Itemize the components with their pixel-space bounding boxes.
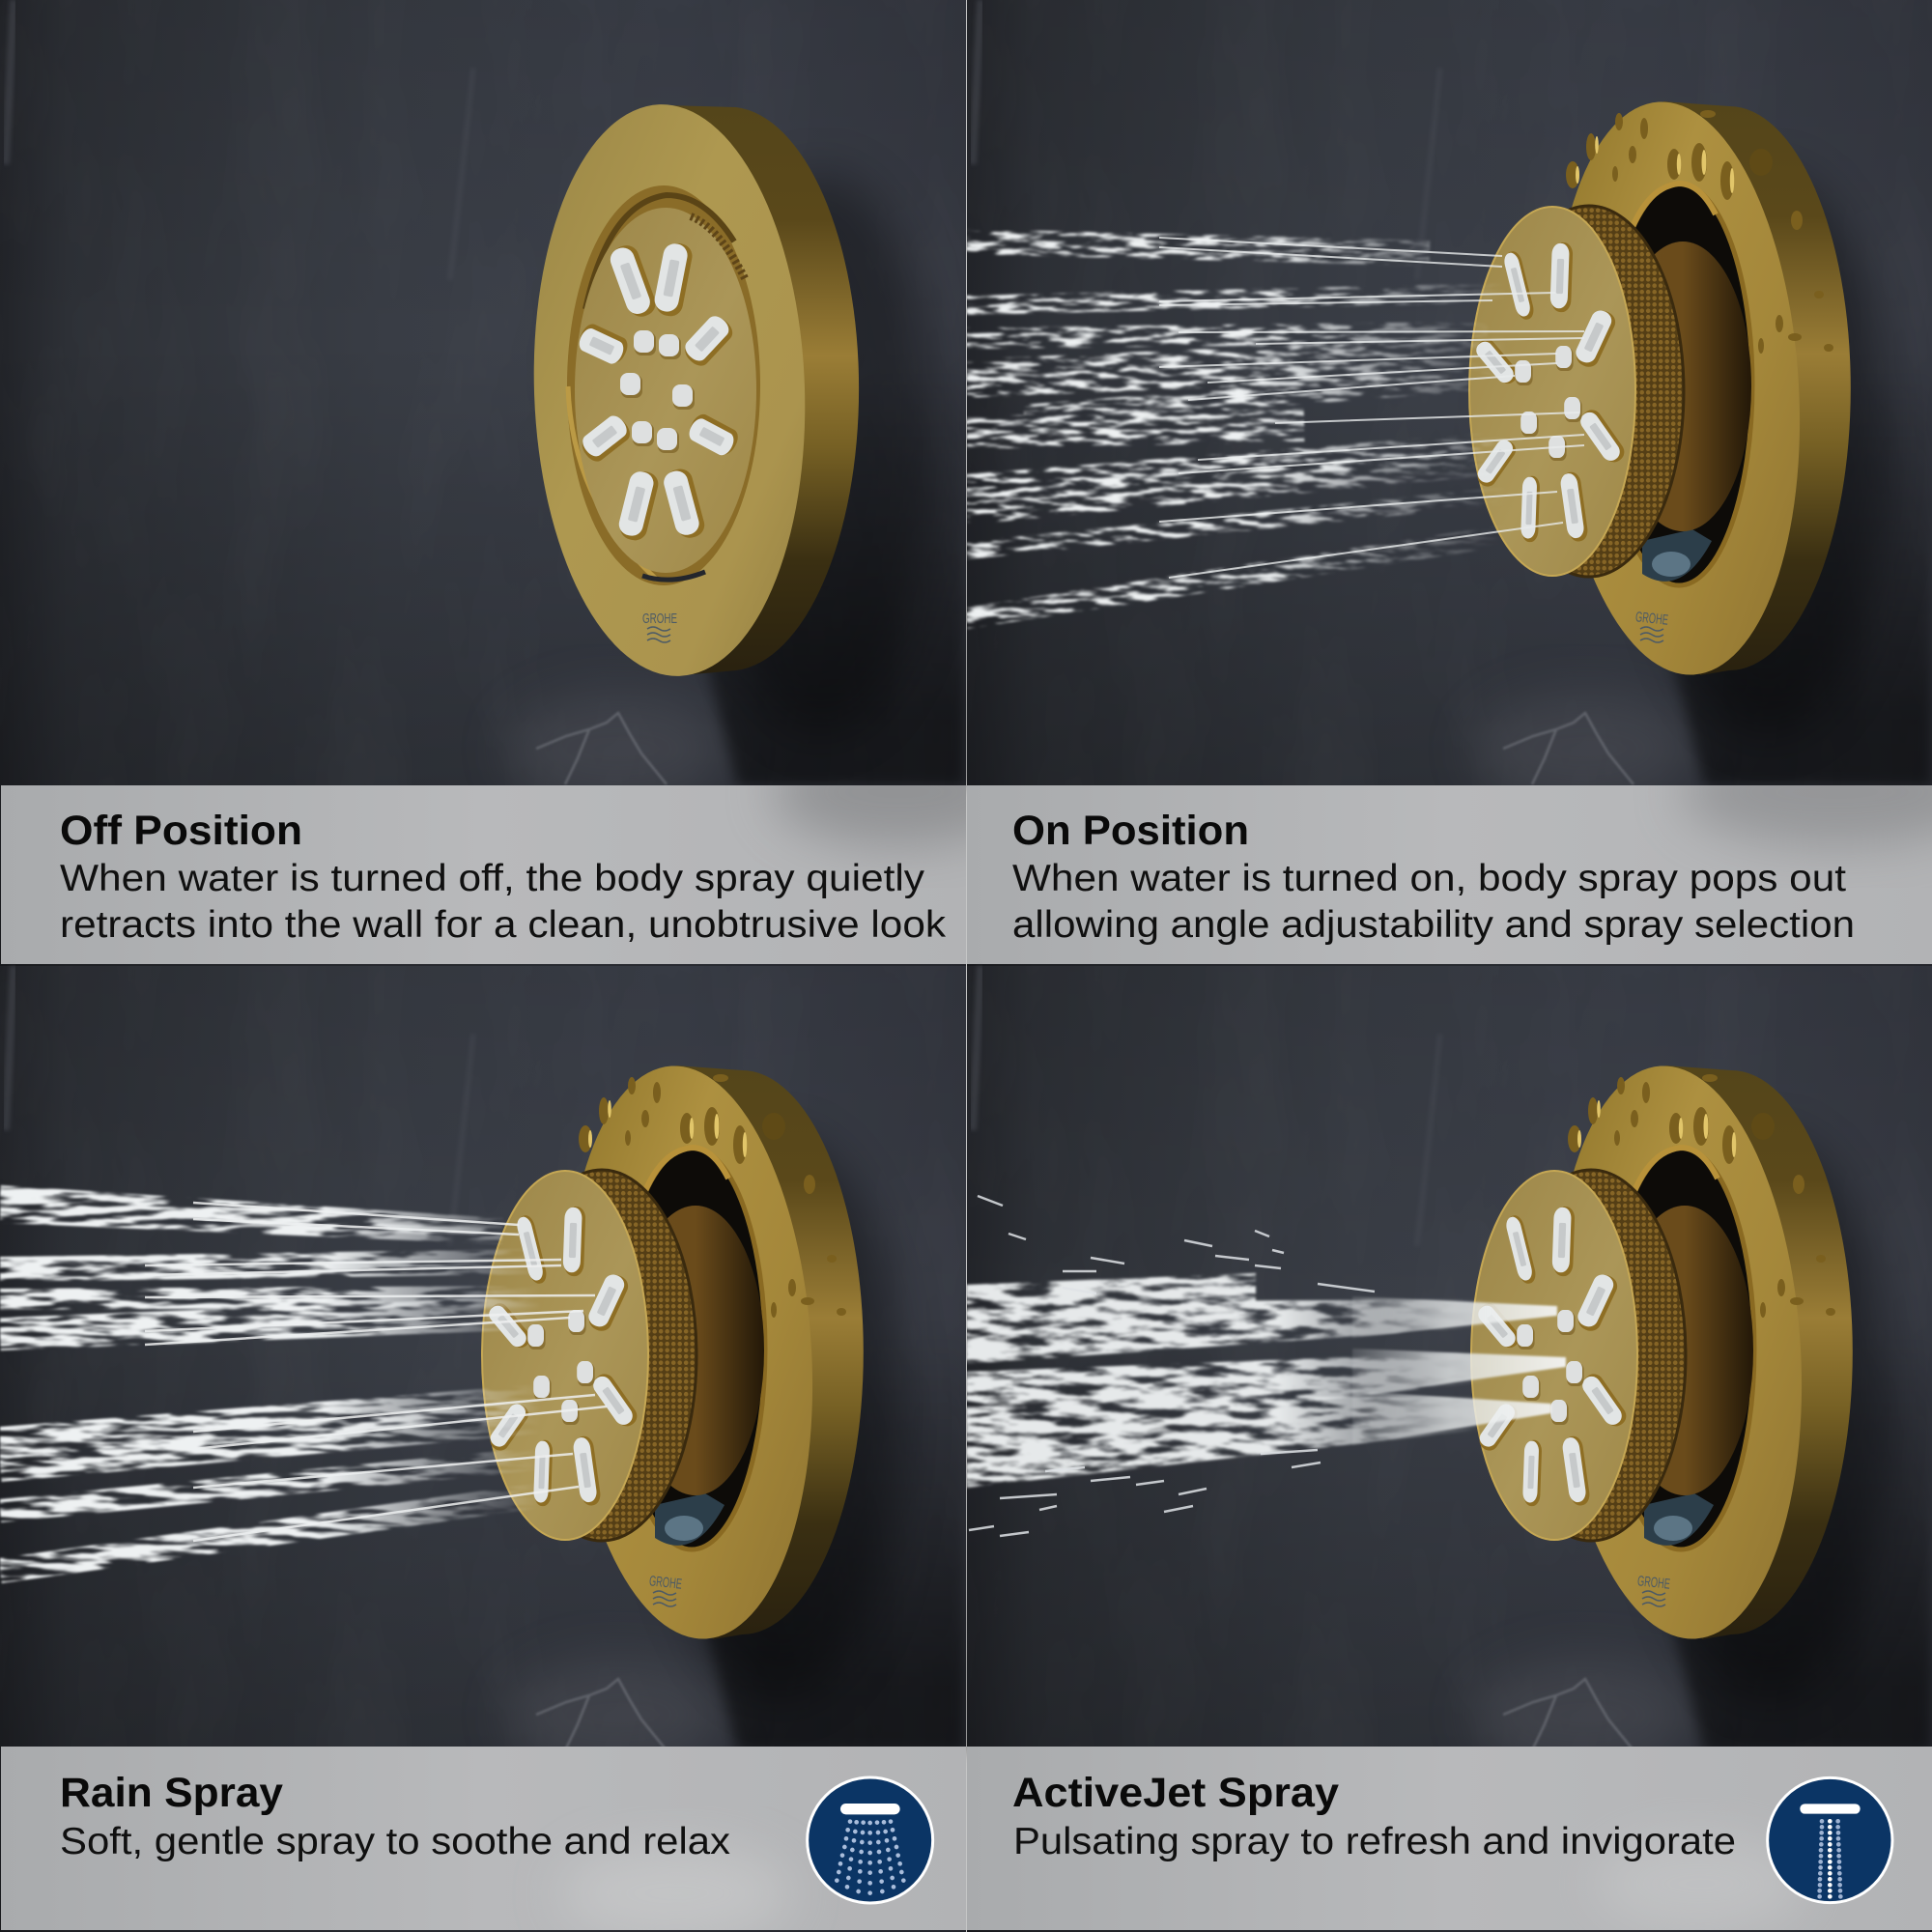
extended body spray xyxy=(1469,95,1889,734)
brand logo xyxy=(642,611,677,642)
water jets xyxy=(966,1196,1566,1536)
nozzles xyxy=(576,241,742,543)
wall background xyxy=(967,966,1932,1932)
body text: When water is turned off, the body spray quietly xyxy=(60,858,925,899)
extended body spray xyxy=(482,1059,901,1698)
flying droplets xyxy=(969,1196,1375,1536)
water jets xyxy=(0,1196,607,1571)
wall background xyxy=(0,966,966,1932)
heading: Off Position xyxy=(60,808,302,854)
brand logo: GROHE xyxy=(1634,609,1669,629)
panel: on position xyxy=(966,0,1932,966)
heading: ActiveJet Spray xyxy=(1012,1770,1339,1816)
brand logo xyxy=(1636,1573,1671,1606)
retracted body spray xyxy=(525,99,937,734)
panel: activejet spray xyxy=(966,966,1932,1932)
heading: On Position xyxy=(1012,808,1249,854)
body text: Pulsating spray to refresh and invigorate xyxy=(1013,1821,1736,1862)
extended body spray xyxy=(1471,1059,1890,1698)
panel: rain spray xyxy=(0,966,966,1932)
wall background xyxy=(967,0,1932,966)
caption: activejet spray xyxy=(967,1747,1932,1932)
panel: off position xyxy=(0,0,1024,966)
brand logo: GROHE xyxy=(648,1573,683,1593)
heading: Rain Spray xyxy=(60,1770,283,1816)
water jets xyxy=(966,238,1584,618)
body text xyxy=(1012,858,1855,946)
brand logo: GROHE xyxy=(642,611,677,627)
wall background xyxy=(0,0,966,966)
caption: rain spray xyxy=(1,1747,966,1932)
icon: activejet spray xyxy=(1768,1777,1892,1903)
icon: rain spray xyxy=(808,1777,933,1903)
caption: off position xyxy=(1,785,966,964)
body text xyxy=(60,864,946,942)
body text: When water is turned on, body spray pops out xyxy=(1012,858,1846,899)
brand logo xyxy=(1634,609,1669,642)
caption: on position xyxy=(967,785,1932,964)
body text: retracts into the wall for a clean, unobtrusive look xyxy=(60,904,947,946)
body text: allowing angle adjustability and spray selection xyxy=(1012,904,1855,946)
brand logo: GROHE xyxy=(1636,1573,1671,1593)
brand logo xyxy=(648,1573,683,1606)
body text: Soft, gentle spray to soothe and relax xyxy=(60,1821,731,1862)
